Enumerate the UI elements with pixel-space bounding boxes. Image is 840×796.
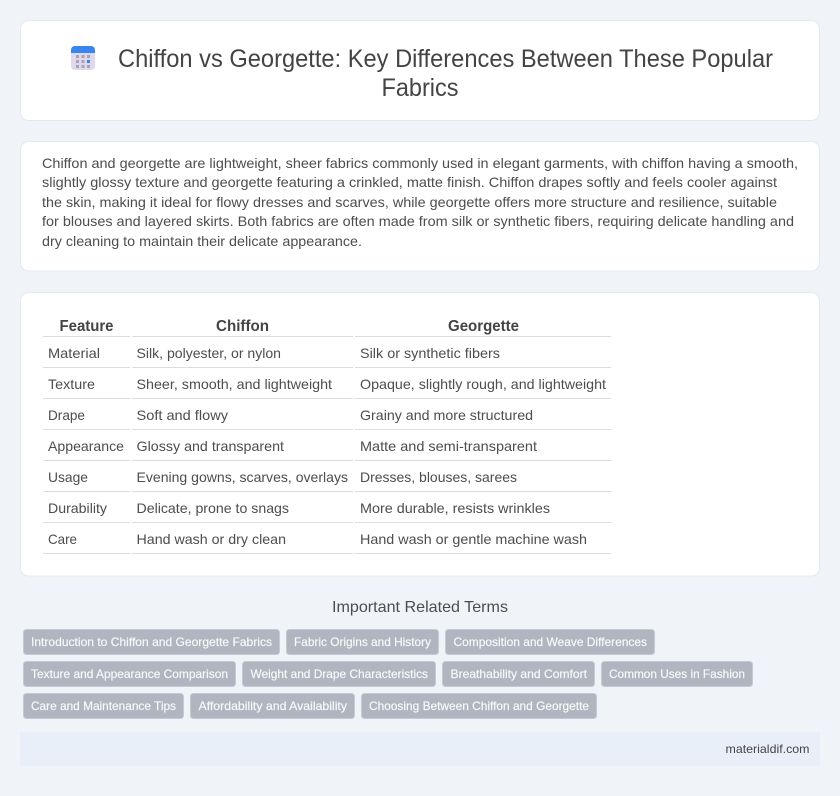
icon: calendar xyxy=(71,46,95,70)
table row: material: Silk or synthetic fibers xyxy=(360,345,500,361)
table row: material: Silk, polyester, or nylon xyxy=(136,345,281,361)
table row: material xyxy=(43,345,611,368)
chip: care xyxy=(24,694,184,718)
chip: composition xyxy=(446,630,654,654)
table row: drape: Grainy and more structured xyxy=(360,407,533,423)
table row: usage: Evening gowns, scarves, overlays xyxy=(136,469,348,485)
chip: care: Care and Maintenance Tips xyxy=(31,699,176,713)
table row: material: Material xyxy=(48,345,100,361)
chip: breathability: Breathability and Comfort xyxy=(450,667,588,681)
title: Chiffon vs Georgette: Key Differences Between These Popular xyxy=(118,45,773,73)
chip: choosing xyxy=(362,694,596,718)
chip: affordability xyxy=(190,694,354,718)
text block: introduction paragraph: Chiffon and georgette are lightweight, sheer fabrics commonly used in elegant garments, with chiffon having a smooth, xyxy=(42,155,798,171)
footer: materialdif.com xyxy=(726,742,810,756)
table row: durability: More durable, resists wrinkles xyxy=(360,500,550,516)
chip: affordability: Affordability and Availability xyxy=(198,699,347,713)
chip: breathability xyxy=(442,662,594,686)
text block: introduction paragraph: the skin, making it ideal for flowy dresses and scarves, while georgette offers more structure and resilience, suitable xyxy=(42,194,777,210)
table row: drape: Soft and flowy xyxy=(136,407,228,423)
table row: care: Hand wash or dry clean xyxy=(136,531,286,547)
table row: usage: Dresses, blouses, sarees xyxy=(360,469,517,485)
table row: care: Hand wash or gentle machine wash xyxy=(360,531,587,547)
table row: appearance: Glossy and transparent xyxy=(136,438,284,454)
table row: durability: Delicate, prone to snags xyxy=(136,500,289,516)
table row: usage xyxy=(43,469,611,492)
table row: appearance: Matte and semi-transparent xyxy=(360,438,537,454)
chip: weight xyxy=(242,662,436,686)
text block: introduction paragraph: for blouses and layered skirts. Both fabrics are often made from silk or synthetic fibers, requiring delicate handling and xyxy=(42,213,794,229)
title: Fabrics xyxy=(382,74,458,102)
chip: weight: Weight and Drape Characteristics xyxy=(250,667,428,681)
heading: important related terms: Important Related Terms xyxy=(332,599,508,616)
chip: texture xyxy=(24,662,236,686)
chip: uses: Common Uses in Fashion xyxy=(609,667,745,681)
table row: drape: Drape xyxy=(48,407,85,423)
footer xyxy=(20,732,820,766)
panel: introduction xyxy=(20,142,820,271)
table row: appearance xyxy=(43,438,611,461)
chip: origins: Fabric Origins and History xyxy=(294,635,431,649)
table header row xyxy=(43,318,611,337)
table row: drape xyxy=(43,407,611,430)
table row: care xyxy=(43,531,611,554)
table row: texture: Sheer, smooth, and lightweight xyxy=(136,376,332,392)
text block: introduction paragraph xyxy=(42,155,798,249)
text block: introduction paragraph: slightly glossy texture and georgette featuring a crinkled, matte finish. Chiffon drapes softly and feels cooler against xyxy=(42,174,777,190)
chip: uses xyxy=(602,662,752,686)
chip: introduction: Introduction to Chiffon and Georgette Fabrics xyxy=(31,635,272,649)
table header row: Chiffon xyxy=(216,318,269,335)
chip: choosing: Choosing Between Chiffon and Georgette xyxy=(369,699,589,713)
table row: usage: Usage xyxy=(48,469,88,485)
table row: texture xyxy=(43,376,611,399)
chip: composition: Composition and Weave Differences xyxy=(454,635,647,649)
table row: texture: Opaque, slightly rough, and lightweight xyxy=(360,376,606,392)
table row: texture: Texture xyxy=(48,376,95,392)
table row: appearance: Appearance xyxy=(48,438,124,454)
table row: care: Care xyxy=(48,531,77,547)
table header row: Georgette xyxy=(448,318,519,335)
chip: origins xyxy=(286,630,438,654)
text block: introduction paragraph: dry cleaning to maintain their delicate appearance. xyxy=(42,233,362,249)
table row: durability: Durability xyxy=(48,500,107,516)
title xyxy=(118,45,773,102)
chip: texture: Texture and Appearance Comparison xyxy=(31,667,228,681)
related terms chips xyxy=(24,630,752,718)
panel: comparison table xyxy=(20,292,820,576)
panel: header xyxy=(20,20,820,120)
table row: durability xyxy=(43,500,611,523)
table header row: Feature xyxy=(60,318,114,335)
chip: introduction xyxy=(24,630,280,654)
